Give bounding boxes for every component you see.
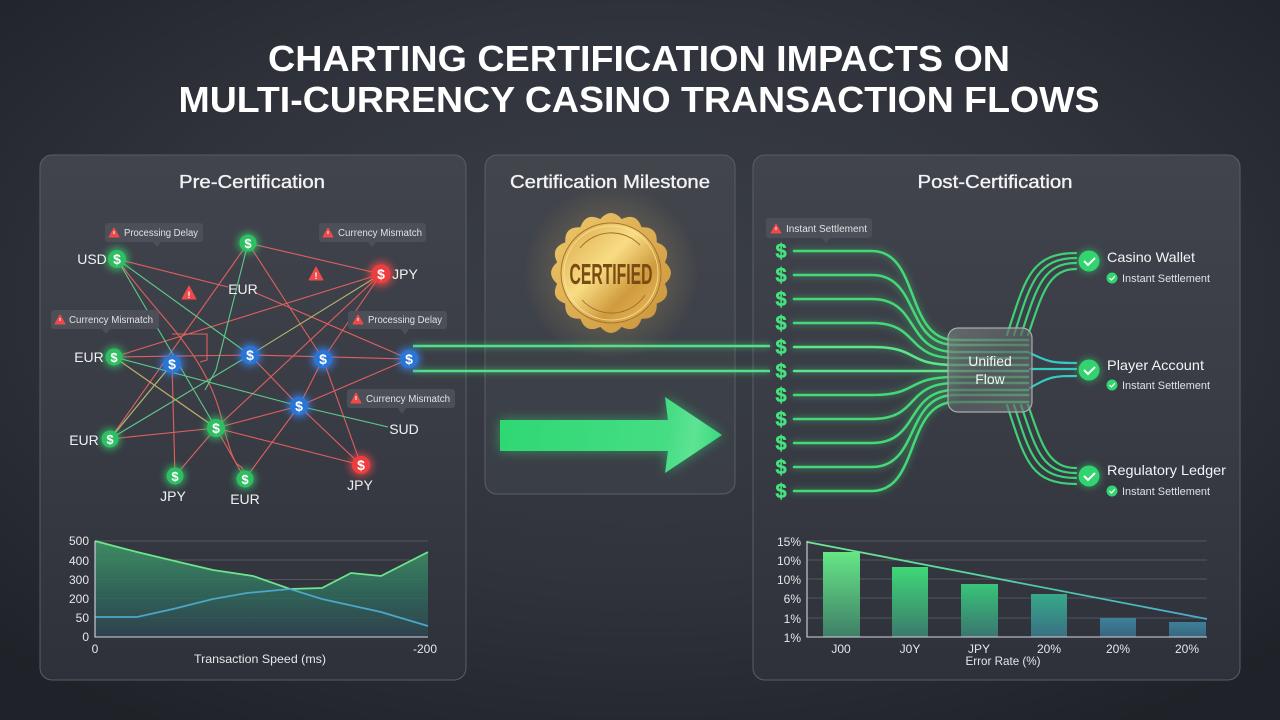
- tag: currency mismatch top: [319, 223, 426, 247]
- title: [178, 38, 1100, 120]
- node: blue 2: $: [246, 347, 254, 363]
- node: JPY green: JPY: [160, 488, 186, 504]
- trend line: [807, 542, 1207, 619]
- node: JPY red: [369, 262, 418, 286]
- node: EUR bottom-left: [69, 429, 120, 449]
- axis labels: 20%: [1175, 642, 1199, 656]
- tag: currency mismatch lower: [347, 389, 455, 414]
- bars: [823, 552, 1206, 637]
- icons: dollar column: $: [775, 481, 787, 503]
- axis labels: 1%: [784, 612, 801, 626]
- line: blue series: [95, 589, 428, 626]
- axis labels: [777, 535, 1199, 668]
- title: MULTI-CURRENCY CASINO TRANSACTION FLOWS: [178, 79, 1100, 120]
- output: player account: [1078, 357, 1210, 392]
- node: EUR left: EUR: [74, 349, 104, 365]
- panel: certification milestone: [485, 155, 735, 494]
- node: blue 3: $: [319, 351, 327, 367]
- tag: processing delay right: [348, 311, 447, 335]
- node: JPY green: [160, 466, 186, 504]
- badge: certified seal: [523, 185, 699, 361]
- icons: dollar column: $: [775, 409, 787, 431]
- badge: certified seal: CERTIFIED: [570, 259, 652, 291]
- icons: dollar column: $: [775, 265, 787, 287]
- axis labels: 15%: [777, 535, 801, 549]
- node: top green: $: [244, 236, 252, 251]
- label: EUR center: EUR: [228, 281, 258, 297]
- area fill: [95, 541, 428, 637]
- flow lines: unified flow to outputs: [1007, 253, 1076, 484]
- heading: pre-certification: Pre-Certification: [179, 172, 325, 192]
- output: regulatory ledger: [1078, 462, 1226, 498]
- axis labels: J00: [831, 642, 851, 656]
- icons: dollar column: $: [775, 457, 787, 479]
- node: JPY red bottom: $: [357, 457, 365, 473]
- node: blue 5: [288, 395, 310, 417]
- axis labels: 300: [69, 573, 89, 587]
- node: blue 3: [312, 348, 334, 370]
- output: regulatory ledger: Instant Settlement: [1122, 486, 1210, 498]
- icons: dollar column: $: [775, 337, 787, 359]
- heading: post-certification: Post-Certification: [918, 172, 1072, 192]
- axis labels: [69, 534, 437, 666]
- axis labels: 400: [69, 554, 89, 568]
- tag: processing delay right: Processing Delay: [368, 315, 442, 326]
- axis labels: 20%: [1037, 642, 1061, 656]
- node: center green: [205, 417, 227, 439]
- axis labels: 10%: [777, 573, 801, 587]
- axis labels: 500: [69, 534, 89, 548]
- heading: certification milestone: Certification Milestone: [510, 172, 710, 192]
- beams: pre to post flow: [413, 346, 770, 371]
- output: casino wallet: Instant Settlement: [1122, 273, 1210, 285]
- icons: dollar column: $: [775, 433, 787, 455]
- axis labels: -200: [413, 642, 437, 656]
- tag: processing delay top: [105, 223, 203, 247]
- icon: warning 2: !: [314, 271, 318, 281]
- tag: currency mismatch lower: Currency Mismatch: [366, 394, 450, 405]
- output: player account: Player Account: [1107, 357, 1204, 373]
- axis labels: Transaction Speed (ms): [194, 652, 326, 666]
- node: EUR green: [230, 469, 260, 507]
- node: EUR left: [74, 347, 124, 367]
- node: JPY green: $: [171, 469, 179, 484]
- node: center green: $: [212, 420, 220, 436]
- chart: error rate: [777, 535, 1207, 668]
- node: blue 1: $: [168, 356, 176, 372]
- output: regulatory ledger: Regulatory Ledger: [1107, 462, 1226, 478]
- node: EUR green: $: [241, 472, 249, 487]
- axis labels: 10%: [777, 554, 801, 568]
- node: JPY red bottom: [347, 454, 373, 493]
- box: unified flow: [948, 328, 1032, 412]
- axis labels: 0: [82, 630, 89, 644]
- arrow: certification to post flow: [500, 397, 722, 473]
- box: unified flow: Flow: [975, 371, 1006, 387]
- output: casino wallet: Casino Wallet: [1107, 249, 1195, 265]
- title: CHARTING CERTIFICATION IMPACTS ON: [268, 38, 1010, 79]
- network edges: [110, 243, 409, 479]
- tag: currency mismatch left: Currency Mismatch: [69, 315, 153, 326]
- axis labels: 200: [69, 592, 89, 606]
- panel: pre-certification: [40, 155, 466, 680]
- flow lines: inputs to unified flow: [794, 251, 1028, 491]
- axis labels: JPY: [968, 642, 990, 656]
- icons: dollar column: $: [775, 361, 787, 383]
- output: player account: Instant Settlement: [1122, 380, 1210, 392]
- tag: processing delay top: Processing Delay: [124, 228, 198, 239]
- node: blue 1: [161, 353, 183, 375]
- node: blue 5: $: [295, 398, 303, 414]
- node: USD: USD: [77, 251, 107, 267]
- box: unified flow: Unified: [968, 353, 1012, 369]
- node: blue 4: [398, 348, 420, 370]
- tag: instant settlement: [766, 218, 872, 243]
- node: blue 2: [239, 344, 261, 366]
- node: top green: [238, 233, 258, 253]
- node: blue 4: $: [405, 351, 413, 367]
- axis labels: 1%: [784, 631, 801, 645]
- label: SUD: SUD: [389, 421, 419, 437]
- output: casino wallet: [1078, 249, 1210, 285]
- node: EUR bottom-left: EUR: [69, 432, 99, 448]
- node: JPY red: $: [377, 266, 385, 282]
- icon: warning 1: [182, 286, 196, 300]
- icon: warning 2: [309, 267, 323, 281]
- axis labels: Error Rate (%): [966, 654, 1041, 668]
- icons: dollar column: $: [775, 313, 787, 335]
- node: EUR left: $: [110, 350, 118, 365]
- axis labels: J0Y: [900, 642, 920, 656]
- panel: post-certification: [753, 155, 1240, 680]
- axis labels: 0: [92, 642, 99, 656]
- axis labels: 20%: [1106, 642, 1130, 656]
- icon: warning 1: !: [188, 290, 190, 300]
- icons: dollar column: $: [775, 289, 787, 311]
- node: EUR green: EUR: [230, 491, 260, 507]
- icons: dollar column: $: [775, 241, 787, 263]
- icons: dollar column: [775, 241, 787, 503]
- tag: currency mismatch left: [51, 310, 159, 334]
- node: USD: $: [113, 251, 121, 267]
- node: USD: [77, 248, 128, 270]
- icons: dollar column: $: [775, 385, 787, 407]
- node: JPY red bottom: JPY: [347, 477, 373, 493]
- chart: transaction speed: [69, 534, 437, 666]
- line: green series: [95, 541, 428, 589]
- tag: instant settlement: Instant Settlement: [786, 224, 867, 235]
- node: EUR bottom-left: $: [106, 432, 114, 447]
- axis labels: 6%: [784, 592, 801, 606]
- node: JPY red: JPY: [392, 266, 418, 282]
- axis labels: 50: [76, 611, 89, 625]
- tag: currency mismatch top: Currency Mismatch: [338, 228, 422, 239]
